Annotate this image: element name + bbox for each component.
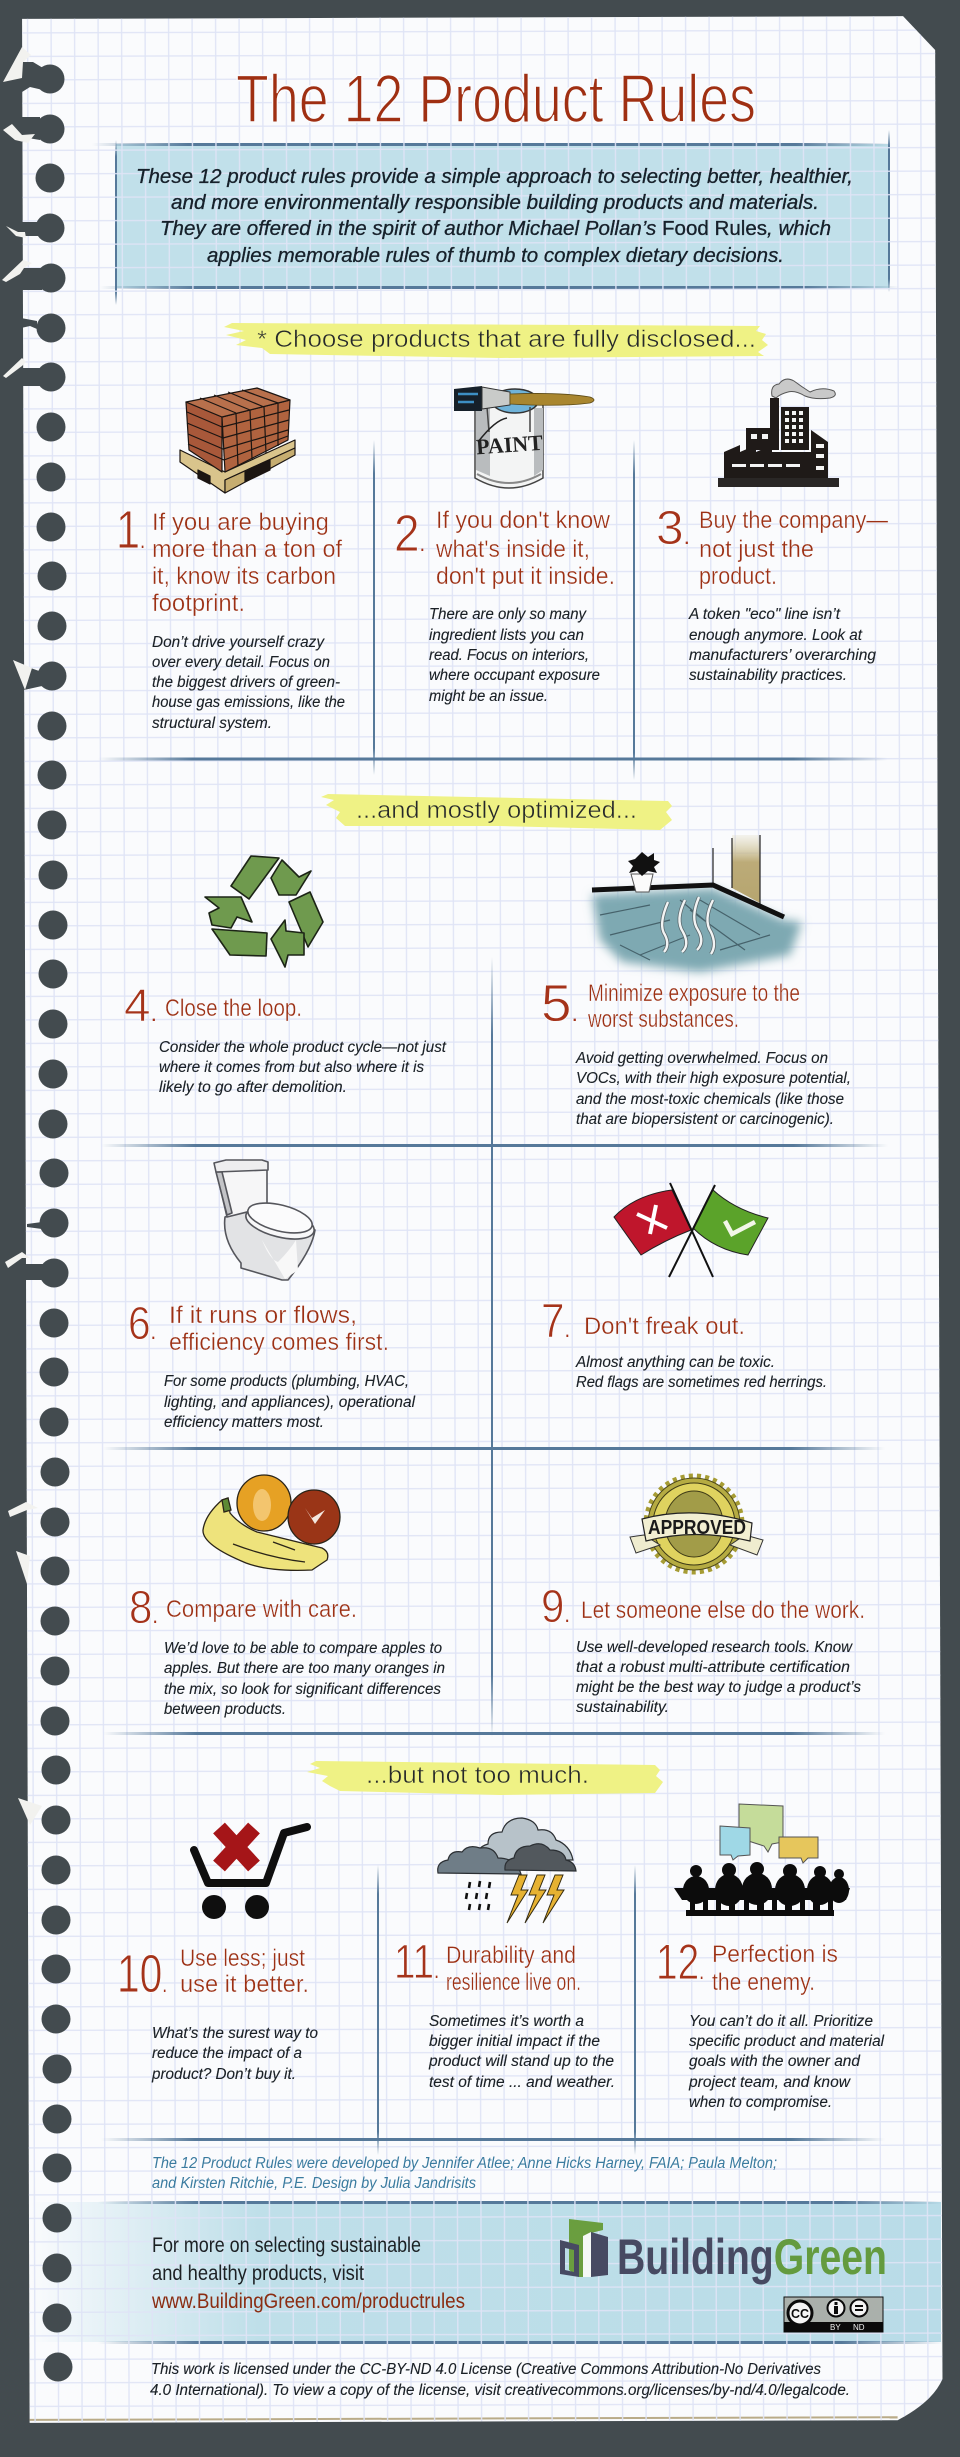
text: rule 12 (688, 2013, 885, 2111)
heading: not too much (307, 1761, 663, 1795)
text: rule 4: Consider the whole product cycle—not just (159, 1039, 447, 1056)
text: rule 10: reduce the impact of a (152, 2045, 302, 2062)
title: The 12 Product Rules (236, 61, 756, 137)
text: rule 1 (152, 634, 345, 732)
text: rule 1: Don’t drive yourself crazy (152, 634, 325, 651)
heading: rule 8: Compare with care. (166, 1596, 357, 1623)
heading: rule 9 (541, 1580, 865, 1632)
intro text: applies memorable rules of thumb to complex dietary decisions. (207, 245, 784, 267)
text: rule 6: lighting, and appliances), operational (164, 1394, 416, 1411)
icon: factory (718, 379, 839, 487)
panel: rule 2 (394, 386, 615, 705)
text: rule 1: house gas emissions, like the (152, 694, 345, 711)
text: rule 12: You can’t do it all. Prioritize (689, 2013, 873, 2030)
license text: This work is licensed under the CC-BY-ND 4.0 License (Creative Commons Attribution-No Derivatives (151, 2361, 821, 2378)
text: rule 11: test of time ... and weather. (429, 2074, 615, 2091)
text: rule 6 (164, 1373, 416, 1431)
heading: not too much: ...but not too much. (366, 1762, 589, 1789)
text: rule 10: What’s the surest way to (152, 2025, 318, 2042)
panel: rule 5 (541, 835, 851, 1128)
license text: 4.0 International). To view a copy of the license, visit creativecommons.org/licenses/by-nd/4.0/legalcode. (150, 2382, 850, 2399)
heading: rule 12 (656, 1934, 838, 1996)
BuildingGreen logo (560, 2219, 887, 2285)
heading: rule 12: the enemy. (712, 1969, 815, 1996)
Creative Commons badge (784, 2297, 883, 2332)
Creative Commons badge: ND (853, 2323, 865, 2332)
credits (152, 2155, 777, 2192)
text: rule 10: product? Don’t buy it. (151, 2066, 296, 2083)
text: rule 5: Avoid getting overwhelmed. Focus on (575, 1050, 828, 1067)
text: rule 1: the biggest drivers of green- (152, 674, 340, 691)
heading: rule 3: Buy the company— (699, 507, 888, 534)
heading: rule 3: 3. (656, 502, 690, 555)
text: rule 8: We’d love to be able to compare apples to (164, 1640, 442, 1657)
panel: intro box (92, 130, 900, 305)
panel: rule 12 (656, 1804, 885, 2111)
text: rule 11: product will stand up to the (428, 2053, 614, 2070)
credits: and Kirsten Ritchie, P.E. Design by Julia Jandrisits (152, 2175, 476, 2192)
heading: rule 11: 11. (394, 1936, 439, 1989)
text: rule 5 (575, 1050, 851, 1128)
heading: rule 5: worst substances. (587, 1006, 739, 1033)
text: rule 12: goals with the owner and (689, 2053, 861, 2070)
icon: crossed flags (614, 1183, 768, 1277)
heading: rule 5 (541, 975, 800, 1033)
text: rule 3: enough anymore. Look at (689, 627, 863, 644)
icon: recycling arrows (205, 856, 323, 967)
heading: rule 12: Perfection is (712, 1941, 838, 1968)
heading: rule 2: 2. (394, 505, 425, 563)
icon: fruit (203, 1475, 340, 1570)
panel: rule 10 (117, 1827, 318, 2083)
panel: rule 3 (656, 379, 888, 684)
text: rule 2: ingredient lists you can (429, 627, 584, 644)
text: rule 8: between products. (164, 1701, 286, 1718)
text: rule 2: where occupant exposure (429, 667, 600, 684)
heading: rule 8: 8. (129, 1581, 158, 1633)
heading: rule 11: resilience live on. (446, 1969, 581, 1996)
panel: rule 4 (124, 856, 447, 1096)
heading: rule 7 (541, 1295, 745, 1348)
text: rule 5: that are biopersistent or carcinogenic). (576, 1111, 834, 1128)
heading: rule 1: more than a ton of (152, 536, 342, 563)
text: rule 2: read. Focus on interiors, (429, 647, 589, 664)
logo wordmark: BuildingGreen (617, 2229, 887, 2285)
heading: rule 12: 12. (656, 1934, 704, 1990)
heading: mostly optimized: ...and mostly optimized... (356, 797, 637, 824)
text: rule 8: apples. But there are too many oranges in (164, 1660, 445, 1677)
text: rule 9: Use well-developed research tools. Know (576, 1639, 854, 1656)
credits: The 12 Product Rules were developed by Jennifer Atlee; Anne Hicks Harney, FAIA; Paula Melton; (152, 2155, 777, 2172)
text: rule 9: that a robust multi-attribute certification (576, 1659, 850, 1676)
Creative Commons badge: CC (791, 2306, 810, 2321)
intro text: These 12 product rules provide a simple approach to selecting better, healthier, (136, 166, 853, 188)
heading: rule 10: Use less; just (180, 1945, 305, 1972)
panel: rule 1 (116, 388, 345, 732)
text: rule 9: might be the best way to judge a product’s (576, 1679, 861, 1696)
text: rule 12: project team, and know (688, 2074, 852, 2091)
text: rule 5: VOCs, with their high exposure potential, (576, 1070, 851, 1087)
heading: rule 5: Minimize exposure to the (588, 980, 800, 1007)
divider lines: middle grid (101, 957, 888, 1737)
icon: approved seal: APPROVED (648, 1517, 746, 1539)
call to action text: For more on selecting sustainable (152, 2234, 421, 2257)
divider lines: last row (101, 1865, 885, 2155)
heading: rule 4: Close the loop. (165, 995, 302, 1022)
text: rule 7: Red flags are sometimes red herrings. (576, 1374, 827, 1391)
heading: rule 6: efficiency comes first. (169, 1329, 389, 1356)
torn binder holes (20, 62, 72, 2382)
text: rule 6: efficiency matters most. (164, 1414, 324, 1431)
heading: rule 1 (116, 500, 342, 617)
heading: rule 7: Don't freak out. (584, 1313, 745, 1340)
heading: rule 2 (394, 505, 615, 590)
intro text: and more environmentally responsible building products and materials. (171, 192, 819, 214)
icon: storm clouds (438, 1818, 576, 1923)
heading: rule 7: 7. (541, 1295, 570, 1348)
call to action text (151, 2234, 465, 2313)
text: rule 2: might be an issue. (429, 688, 548, 705)
panel: footer blue band (30, 2201, 943, 2344)
text: rule 4 (159, 1039, 447, 1096)
text: rule 2: There are only so many (429, 606, 587, 623)
text: rule 9: sustainability. (576, 1699, 669, 1716)
heading: fully disclosed: * Choose products that are fully disclosed... (257, 326, 756, 353)
text: rule 2 (429, 606, 600, 705)
text: rule 8: the mix, so look for significant differences (164, 1681, 441, 1698)
heading: rule 6: If it runs or flows, (169, 1302, 357, 1329)
intro text (136, 166, 853, 267)
text: rule 4: likely to go after demolition. (159, 1079, 347, 1096)
icon: meeting silhouettes with speech bubbles (674, 1804, 850, 1916)
heading: rule 6 (128, 1297, 389, 1356)
heading: rule 9: Let someone else do the work. (581, 1597, 865, 1624)
heading: rule 8 (129, 1581, 357, 1633)
icon: shopping cart with X (194, 1827, 307, 1919)
heading: fully disclosed (224, 323, 768, 358)
text: rule 4: where it comes from but also where it is (159, 1059, 424, 1076)
call to action text: www.BuildingGreen.com/productrules (151, 2290, 465, 2313)
heading: rule 1: 1. (116, 500, 145, 560)
heading: rule 11 (394, 1936, 581, 1996)
text: rule 1: over every detail. Focus on (152, 654, 330, 671)
panel: rule 11 (394, 1818, 615, 2091)
panel: rule 8 (129, 1475, 445, 1718)
text: rule 10 (151, 2025, 318, 2083)
heading: rule 10 (117, 1944, 309, 2004)
panel: rule 9 (541, 1477, 865, 1716)
text: rule 6: For some products (plumbing, HVAC, (164, 1373, 409, 1390)
heading: rule 10: 10. (117, 1944, 167, 2004)
torn paper flaps (2, 47, 42, 1825)
text: rule 11: bigger initial impact if the (429, 2033, 600, 2050)
text: rule 3 (688, 606, 876, 684)
heading: rule 9: 9. (541, 1580, 570, 1632)
heading: rule 10: use it better. (180, 1971, 309, 1998)
heading: rule 3: not just the (699, 536, 814, 563)
icon: toilet (214, 1160, 317, 1280)
icon: floor with fumes (592, 835, 802, 972)
heading: rule 4: 4. (124, 979, 157, 1031)
text: rule 12: specific product and material (689, 2033, 885, 2050)
panel: rule 7 (541, 1183, 827, 1391)
text: rule 7: Almost anything can be toxic. (575, 1354, 775, 1371)
icon: brick pallet (180, 388, 295, 493)
heading: mostly optimized (321, 794, 672, 830)
text: rule 3: manufacturers’ overarching (689, 647, 876, 664)
icon: approved seal (630, 1477, 763, 1571)
text: rule 8 (164, 1640, 445, 1718)
heading: rule 6: 6. (128, 1297, 156, 1349)
divider lines: first row (98, 440, 888, 780)
heading: rule 2: what's inside it, (435, 536, 590, 563)
text: rule 1: structural system. (152, 715, 272, 732)
heading: rule 4 (124, 979, 302, 1031)
heading: rule 2: If you don't know (436, 507, 611, 534)
icon: logo building (560, 2219, 608, 2277)
heading: rule 2: don't put it inside. (436, 563, 615, 590)
license text (150, 2361, 850, 2399)
heading: rule 3: product. (699, 563, 777, 590)
text: rule 11 (428, 2013, 615, 2091)
Creative Commons badge: BY (830, 2323, 841, 2332)
text: rule 3: A token "eco" line isn’t (688, 606, 841, 623)
text: rule 3: sustainability practices. (689, 667, 847, 684)
text: rule 11: Sometimes it’s worth a (429, 2013, 584, 2030)
heading: rule 1: If you are buying (152, 509, 329, 536)
icon: paint can: PAINT (475, 430, 544, 459)
text: rule 9 (576, 1639, 861, 1716)
text: rule 7 (575, 1354, 827, 1391)
heading: rule 3 (656, 502, 888, 590)
panel: rule 6 (128, 1160, 416, 1431)
call to action text: and healthy products, visit (152, 2262, 364, 2285)
text: rule 5: and the most-toxic chemicals (like those (576, 1091, 844, 1108)
heading: rule 1: it, know its carbon (152, 563, 336, 590)
text: rule 12: when to compromise. (689, 2094, 832, 2111)
heading: rule 11: Durability and (446, 1942, 576, 1969)
heading: rule 1: footprint. (152, 590, 245, 617)
icon: paint can (454, 386, 594, 488)
intro text: They are offered in the spirit of author Michael Pollan’s Food Rules, which (160, 218, 831, 240)
heading: rule 5: 5. (541, 975, 578, 1033)
